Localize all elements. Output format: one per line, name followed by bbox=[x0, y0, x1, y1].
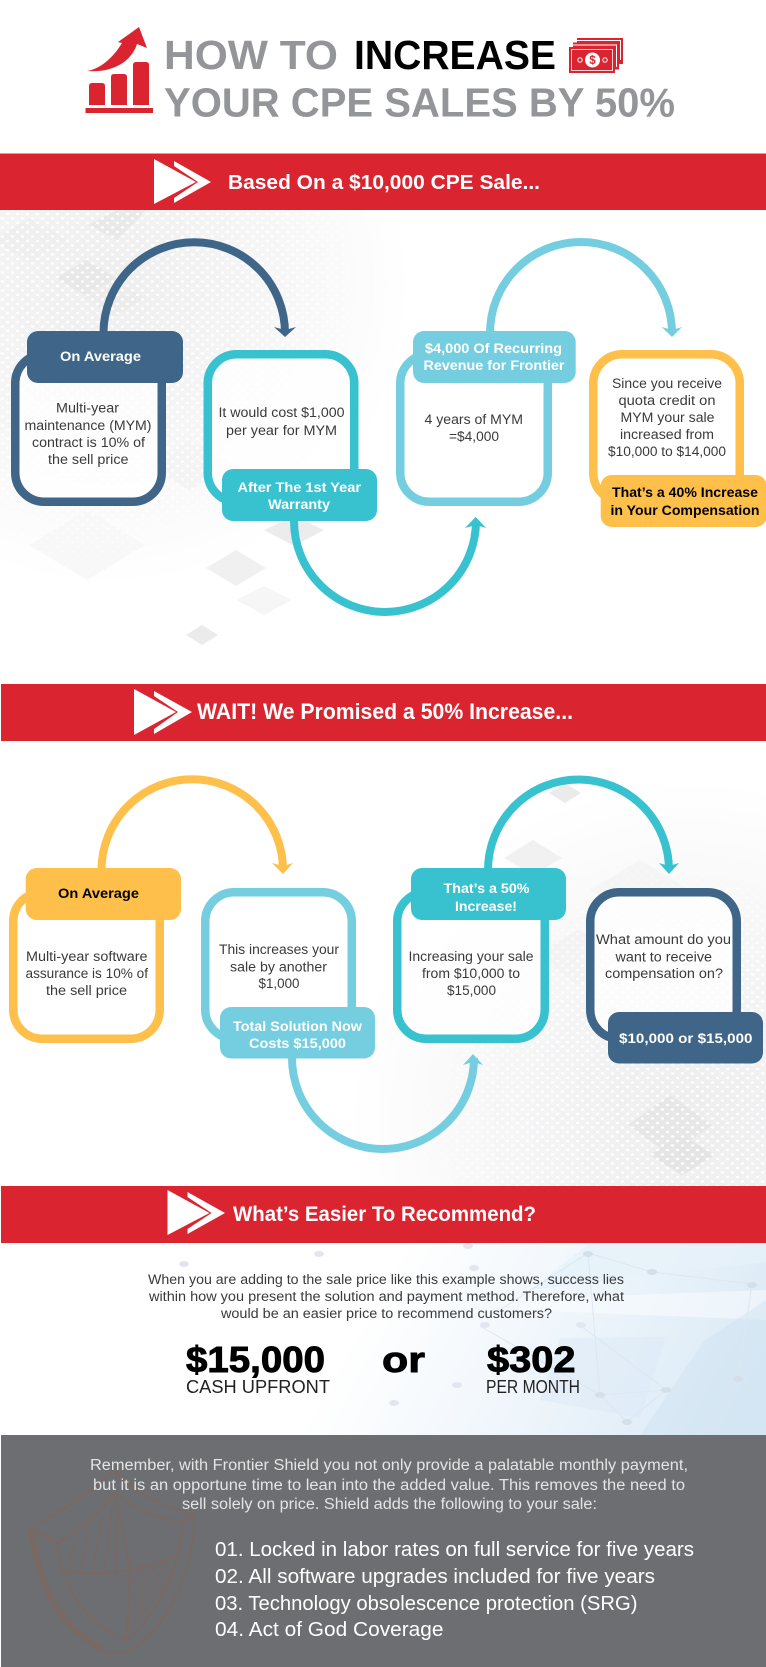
banner: based on a $10,000 CPE sale: Based On a $10,000 CPE Sale... bbox=[228, 171, 540, 194]
flow one step one: on average: Multi-year bbox=[56, 401, 119, 417]
flow one step two: after the first year warranty bbox=[208, 354, 486, 612]
price option: per month bbox=[486, 1339, 580, 1397]
title bbox=[164, 32, 675, 126]
flow two step four: what amount bbox=[590, 892, 763, 1064]
flow one step four: 40% increase: quota credit on bbox=[618, 393, 716, 409]
background: section three blue network bbox=[0, 1243, 766, 1435]
icon: hand-drawn shield bbox=[29, 1470, 195, 1653]
flow one step two: after the first year warranty: Warranty bbox=[268, 496, 330, 512]
list: shield benefits bbox=[215, 1539, 694, 1641]
flow two step four: what amount: want to receive bbox=[614, 950, 712, 966]
flow one step two: after the first year warranty: After The 1st Year bbox=[238, 479, 362, 495]
text block: recommendation intro bbox=[148, 1272, 624, 1322]
flow two step four: what amount: What amount do you bbox=[596, 932, 731, 948]
text block: recommendation intro: within how you present the solution and payment method. Therefore, what bbox=[148, 1289, 624, 1305]
list: shield benefits: 02. All software upgrades included for five years bbox=[215, 1566, 655, 1588]
title: INCREASE bbox=[354, 32, 556, 78]
text block: recommendation intro: would be an easier price to recommend customers? bbox=[220, 1306, 552, 1322]
title: YOUR CPE SALES BY 50% bbox=[164, 80, 675, 126]
text block: shield intro: but it is an opportune time to lean into the added value. This removes the need to bbox=[93, 1477, 685, 1494]
flow one step four: 40% increase: MYM your sale bbox=[620, 410, 715, 426]
flow two step four: what amount: compensation on? bbox=[605, 966, 723, 982]
flow two step three: 50% increase: Increasing your sale bbox=[408, 949, 534, 965]
banner: what's easier to recommend: What’s Easier To Recommend? bbox=[233, 1203, 536, 1226]
background: section one diamond pattern bbox=[0, 210, 324, 645]
flow two step three: 50% increase bbox=[397, 780, 679, 1039]
flow one step four: 40% increase: That’s a 40% Increase bbox=[612, 484, 758, 500]
flow two step two: total solution: $1,000 bbox=[258, 976, 300, 992]
flow two step three: 50% increase: from $10,000 to bbox=[422, 966, 520, 982]
flow two step one: on average bbox=[13, 779, 293, 1039]
flow one step three: recurring revenue: 4 years of MYM bbox=[424, 412, 523, 428]
flow one step four: 40% increase: $10,000 to $14,000 bbox=[608, 444, 726, 460]
flow one step one: on average: maintenance (MYM) bbox=[24, 418, 152, 434]
flow two step two: total solution: Costs $15,000 bbox=[249, 1035, 346, 1051]
flow one step one: on average bbox=[15, 242, 296, 502]
list: shield benefits: 04. Act of God Coverage bbox=[215, 1619, 444, 1641]
list: shield benefits: 03. Technology obsolescence protection (SRG) bbox=[215, 1593, 638, 1615]
flow two step two: total solution: sale by another bbox=[230, 960, 327, 976]
banner: wait, we promised a 50% increase bbox=[1, 684, 766, 741]
flow one step four: 40% increase: increased from bbox=[620, 427, 714, 443]
banner: wait, we promised a 50% increase: WAIT! We Promised a 50% Increase... bbox=[197, 699, 573, 724]
flow one step three: recurring revenue bbox=[400, 242, 682, 502]
icon: rising bar chart with arrow bbox=[86, 27, 153, 113]
price option: cash upfront: CASH UPFRONT bbox=[186, 1377, 330, 1397]
flow one step one: on average: contract is 10% of bbox=[32, 435, 145, 451]
flow two step one: on average: On Average bbox=[58, 885, 139, 901]
text block: shield intro bbox=[90, 1457, 688, 1513]
icon: stack of money: $ bbox=[589, 55, 596, 67]
flow two step two: total solution: This increases your bbox=[219, 942, 339, 958]
flow two step two: total solution bbox=[205, 892, 483, 1149]
text block: shield intro: Remember, with Frontier Shield you not only provide a palatable monthly payment, bbox=[90, 1457, 688, 1474]
flow two step one: on average: Multi-year software bbox=[26, 949, 148, 965]
list: shield benefits: 01. Locked in labor rates on full service for five years bbox=[215, 1539, 694, 1561]
banner: what's easier to recommend bbox=[1, 1186, 766, 1243]
flow two step four: what amount: $10,000 or $15,000 bbox=[619, 1030, 753, 1046]
flow one step two: after the first year warranty: It would cost $1,000 bbox=[218, 405, 345, 421]
price option: cash upfront: $15,000 bbox=[186, 1339, 325, 1380]
flow two step one: on average: assurance is 10% of bbox=[26, 966, 148, 982]
or separator: or bbox=[382, 1339, 425, 1380]
flow one step one: on average: On Average bbox=[60, 348, 141, 364]
text block: shield intro: sell solely on price. Shield adds the following to your sale: bbox=[182, 1496, 597, 1513]
price option: cash upfront bbox=[186, 1339, 330, 1397]
flow two step one: on average: the sell price bbox=[46, 983, 127, 999]
icon: stack of money bbox=[569, 38, 623, 73]
flow one step four: 40% increase: Since you receive bbox=[612, 376, 722, 392]
text block: recommendation intro: When you are adding to the sale price like this example shows, success lies bbox=[148, 1272, 624, 1288]
flow one step one: on average: the sell price bbox=[48, 452, 129, 468]
flow two step three: 50% increase: $15,000 bbox=[447, 983, 496, 999]
background: section two diamond pattern bbox=[487, 784, 766, 1186]
price option: per month: PER MONTH bbox=[486, 1377, 580, 1397]
flow one step four: 40% increase: in Your Compensation bbox=[610, 502, 760, 518]
banner: based on a $10,000 CPE sale bbox=[0, 154, 766, 210]
flow one step three: recurring revenue: =$4,000 bbox=[449, 429, 499, 445]
flow one step two: after the first year warranty: per year for MYM bbox=[226, 423, 337, 439]
panel: frontier shield benefits bbox=[1, 1435, 766, 1667]
flow two step two: total solution: Total Solution Now bbox=[233, 1018, 362, 1034]
price option: per month: $302 bbox=[487, 1339, 576, 1380]
flow two step three: 50% increase: Increase! bbox=[455, 898, 517, 914]
title: HOW TO bbox=[164, 32, 338, 78]
flow two step three: 50% increase: That’s a 50% bbox=[444, 880, 530, 896]
flow one step three: recurring revenue: $4,000 Of Recurring bbox=[425, 340, 562, 356]
flow one step three: recurring revenue: Revenue for Frontier bbox=[424, 357, 565, 373]
flow one step four: 40% increase bbox=[593, 354, 766, 527]
